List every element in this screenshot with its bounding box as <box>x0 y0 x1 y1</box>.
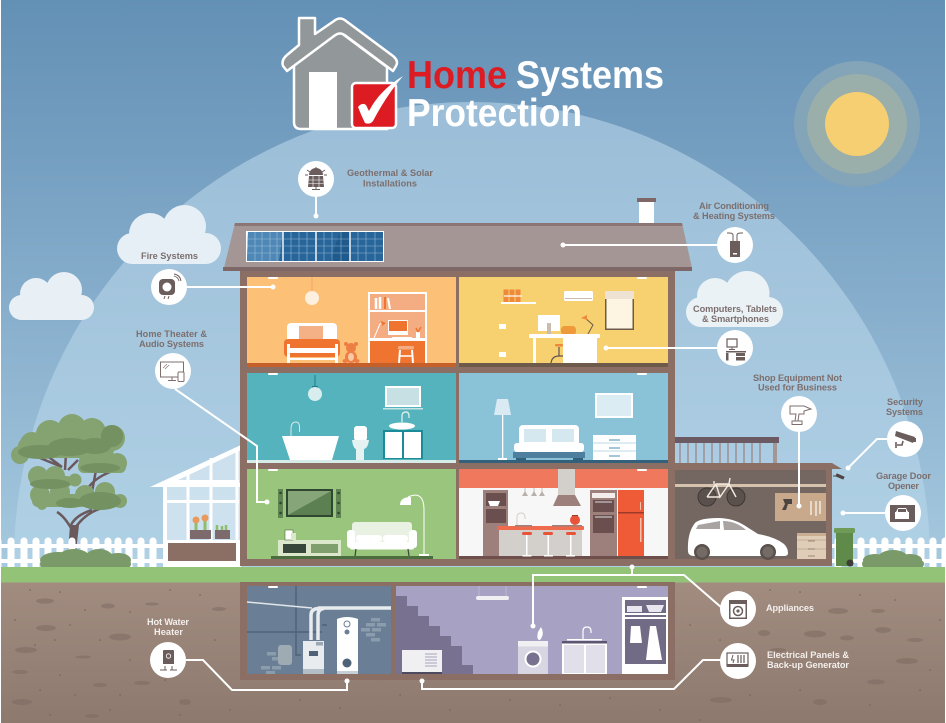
room: kitchen <box>459 469 668 559</box>
closet <box>622 597 668 674</box>
picket fence: left <box>0 541 165 570</box>
icon: garage door <box>885 495 921 531</box>
icon: electrical panel <box>720 643 756 679</box>
icon: home theater <box>155 353 191 389</box>
label: computers: & Smartphones <box>702 314 769 324</box>
label: electrical panels <box>767 650 849 670</box>
title <box>407 54 664 135</box>
logo: house with check mark <box>282 18 403 129</box>
bricks <box>261 618 386 674</box>
connector: garage door <box>840 510 888 516</box>
bookcase with desk <box>368 292 427 363</box>
chimney <box>637 198 656 223</box>
title: Systems <box>516 54 664 97</box>
icon: appliances <box>720 591 756 627</box>
icon: computers <box>717 330 753 366</box>
connector: appliances <box>530 564 722 628</box>
ground: soil <box>0 582 946 723</box>
sink cabinet <box>562 627 607 674</box>
label: computers: Computers, Tablets <box>693 304 777 314</box>
label: hot water heater: Hot Water <box>147 617 189 627</box>
bed <box>284 323 340 363</box>
label: home theater <box>136 329 207 349</box>
label: appliances: Appliances <box>766 603 814 613</box>
icon: water heater <box>150 642 186 678</box>
room: living room <box>247 469 456 559</box>
sun <box>794 61 920 187</box>
furnace <box>303 641 324 674</box>
tree <box>11 414 127 552</box>
tv and speakers <box>278 489 341 518</box>
ceiling light <box>476 586 509 600</box>
bush: right <box>862 550 924 568</box>
icon: security camera <box>887 421 923 457</box>
floor lamp <box>400 495 429 556</box>
icon: drill <box>781 396 817 432</box>
icon: air conditioning <box>717 227 753 263</box>
connector: geothermal <box>314 197 318 218</box>
label: shop equipment: Shop Equipment Not <box>753 373 842 383</box>
house body walls <box>240 271 675 566</box>
label: security systems: Security <box>887 397 924 407</box>
label: home theater: Audio Systems <box>139 339 204 349</box>
console <box>278 530 341 556</box>
solar panels <box>246 231 384 262</box>
car <box>688 518 788 560</box>
label: electrical panels: Back-up Generator <box>767 660 849 670</box>
title: Protection <box>407 92 582 135</box>
label: security systems: Systems <box>886 407 923 417</box>
sky dome <box>14 102 930 570</box>
connector: fire <box>187 284 276 290</box>
label: home theater: Home Theater & <box>136 329 207 339</box>
sky background <box>0 0 946 570</box>
connector: home theater <box>175 389 270 504</box>
connector: air conditioning <box>560 242 720 248</box>
icon: geothermal and solar <box>298 161 334 197</box>
connector: hot water <box>186 660 350 690</box>
label: shop equipment <box>753 373 842 392</box>
label: hot water heater <box>147 617 189 637</box>
stairs <box>396 596 473 674</box>
label: air conditioning: & Heating Systems <box>693 211 775 221</box>
label: garage door opener: Opener <box>888 481 919 491</box>
picket fence: right <box>832 541 946 570</box>
desk <box>529 315 600 363</box>
connector: security <box>846 439 890 470</box>
room: home office <box>459 277 668 367</box>
label: air conditioning: Air Conditioning <box>699 201 769 211</box>
label: electrical panels: Electrical Panels & <box>767 650 849 660</box>
connector: electrical <box>420 660 722 689</box>
label: garage door opener <box>876 471 931 491</box>
cloud: behind computers label <box>686 271 783 327</box>
wheelie bin <box>834 528 855 566</box>
label: geothermal and solar <box>347 168 433 188</box>
garage balcony <box>675 437 779 463</box>
label: shop equipment: Used for Business <box>758 382 837 392</box>
ground: grass strip <box>0 567 946 582</box>
label: computers <box>693 304 777 324</box>
flower pots <box>190 514 230 539</box>
garage <box>675 463 844 566</box>
room: utility basement <box>247 586 391 674</box>
drawers <box>797 533 826 559</box>
label: geothermal and solar: Geothermal & Solar <box>347 168 433 178</box>
label: garage door opener: Garage Door <box>876 471 931 481</box>
room: bedroom <box>247 277 456 367</box>
label: geothermal and solar: Installations <box>363 178 417 188</box>
sofa <box>347 522 417 556</box>
bicycle <box>698 478 745 506</box>
icon: fire systems <box>151 269 187 305</box>
label: security systems <box>886 397 924 417</box>
label: fire systems: Fire Systems <box>141 251 198 261</box>
connector: computers <box>604 346 720 350</box>
greenhouse <box>150 445 241 567</box>
water heater tank <box>337 617 358 674</box>
washer <box>518 627 548 674</box>
security camera small <box>833 474 844 479</box>
room: bedroom blue <box>459 373 668 463</box>
generator <box>402 650 442 674</box>
label: air conditioning <box>693 201 775 221</box>
label: hot water heater: Heater <box>154 627 183 637</box>
basement walls <box>240 582 675 680</box>
cloud: behind fire systems label <box>117 205 221 264</box>
room: bathroom <box>247 373 456 463</box>
bush: left <box>40 549 131 568</box>
house roof <box>223 223 692 271</box>
expansion tank <box>278 645 292 665</box>
room: laundry basement <box>396 586 668 674</box>
title: Home <box>407 54 507 97</box>
teddy bear <box>342 342 360 363</box>
cloud: left small <box>9 272 94 320</box>
pegboard with tools <box>775 493 826 521</box>
connector: shop equipment <box>796 430 802 508</box>
